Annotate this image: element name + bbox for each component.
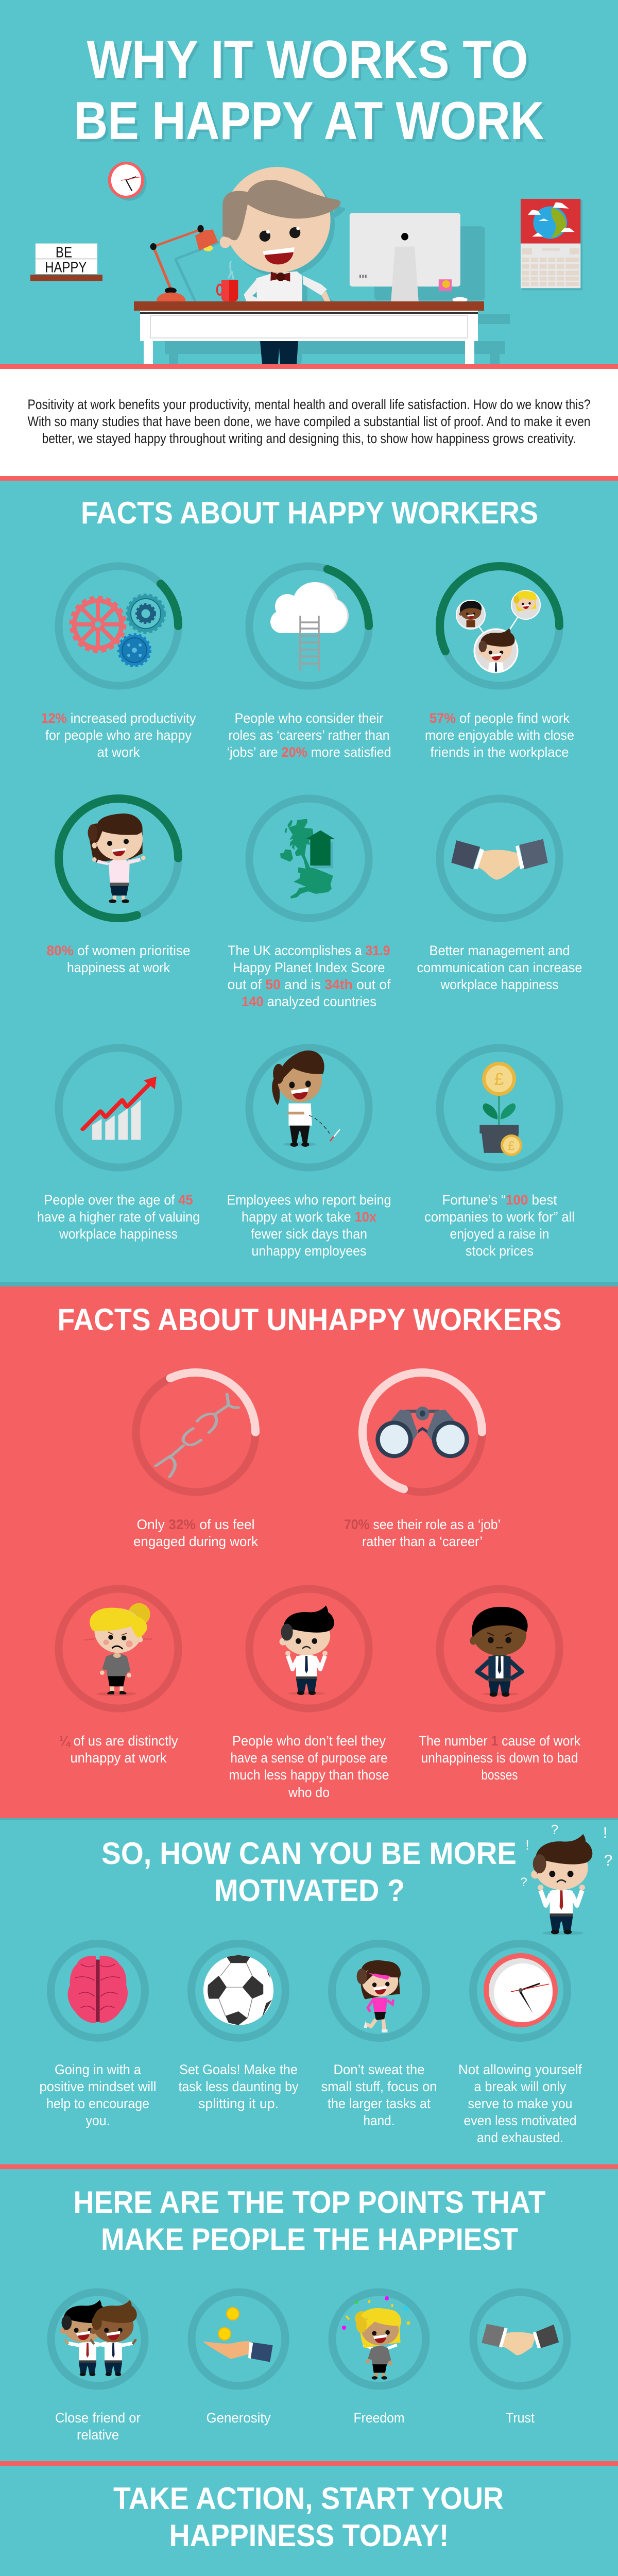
tip: positive mindset, brain: positive mindset will: [39, 2079, 157, 2094]
icon: be happy lightbox sign: HAPPY: [45, 259, 87, 276]
character: confused man: ?: [551, 1822, 558, 1837]
fact: 80% of women: happiness at work: [67, 960, 170, 975]
point: freedom, woman with confetti: [332, 2292, 426, 2426]
fact: management, handshake: Better management and: [430, 943, 570, 958]
tip: positive mindset, brain: [39, 1943, 157, 2128]
point: trust, handshake: [473, 2292, 567, 2426]
fact: sense of purpose, sad man: [229, 1589, 389, 1800]
character: confused man: [520, 1822, 612, 1935]
point: freedom, woman with confetti: Freedom: [353, 2410, 405, 2426]
panel: how can you be more motivated: [39, 1822, 612, 2145]
fact: 32% engaged, broken chain: Only 32% of us feel: [137, 1517, 254, 1532]
fact: fortune 100 best, money plant: Fortune’s “100 best: [442, 1192, 557, 1208]
tip: small stuff, running woman: hand.: [364, 2113, 394, 2128]
tip: take a break, clock: a break will only: [474, 2079, 566, 2094]
tip: small stuff, running woman: the larger tasks at: [328, 2096, 431, 2111]
heading: TAKE ACTION, START YOUR: [113, 2481, 504, 2516]
fact: fortune 100 best, money plant: £: [494, 1070, 504, 1089]
fact: 57% close friends: 57% of people find work: [430, 710, 570, 726]
fact: careers 20%, cloud and ladder: roles as ‘careers’ rather than: [229, 727, 389, 743]
fact: over 45, rising chart: [37, 1048, 200, 1242]
fact: fewer sick days, woman with thermometer: happy at work take 10x: [242, 1209, 376, 1225]
fact: fewer sick days, woman with thermometer: Employees who report being: [227, 1192, 391, 1208]
panel: facts about happy workers: [34, 496, 582, 1259]
tip: positive mindset, brain: help to encourage: [46, 2096, 149, 2111]
character: confused man: ?: [520, 1875, 527, 1889]
icon: desk lamp: [150, 225, 221, 301]
fact: careers 20%, cloud and ladder: People who consider their: [235, 710, 384, 726]
fact: over 45, rising chart: People over the age of 45: [44, 1192, 193, 1208]
fact: fortune 100 best, money plant: enjoyed a raise in: [450, 1226, 549, 1242]
fact: quarter unhappy, angry blonde woman: unhappy at work: [70, 1750, 167, 1766]
divider bar: [0, 2461, 618, 2466]
fact: number 1 cause, bad boss: The number 1 cause of work: [419, 1733, 580, 1749]
tip: set goals, football: splitting it up.: [198, 2096, 279, 2111]
fact: number 1 cause, bad boss: bosses: [481, 1767, 518, 1783]
icon: be happy lightbox sign: BE: [56, 244, 72, 261]
fact: fewer sick days, woman with thermometer: [227, 1048, 391, 1259]
fact: number 1 cause, bad boss: unhappiness is down to bad: [421, 1750, 578, 1766]
illustration: desk: [134, 301, 510, 364]
fact: 57% close friends: friends in the workplace: [431, 744, 569, 760]
fact: 12% productivity, gears: for people who are happy: [45, 727, 192, 743]
fact: UK happy planet index, map: Happy Planet Index Score: [233, 960, 385, 975]
heading: MAKE PEOPLE THE HAPPIEST: [101, 2222, 518, 2257]
character: happy office worker: [217, 167, 346, 301]
tip: small stuff, running woman: small stuff, focus on: [321, 2079, 437, 2094]
fact: 32% engaged, broken chain: engaged during work: [133, 1534, 258, 1549]
icon: be happy lightbox sign: [30, 244, 102, 281]
divider bars: [0, 364, 618, 481]
heading: SO, HOW CAN YOU BE MORE: [101, 1836, 517, 1871]
fact: UK happy planet index, map: [228, 799, 391, 1009]
point: generosity, hand with coins: Generosity: [206, 2410, 271, 2426]
heading: FACTS ABOUT UNHAPPY WORKERS: [58, 1302, 561, 1337]
heading: [101, 1836, 517, 1908]
fact: careers 20%, cloud and ladder: ‘jobs’ are 20% more satisfied: [227, 744, 391, 760]
point: close friend, two men: relative: [77, 2427, 119, 2443]
icon: wall clock: [108, 162, 147, 201]
heading: [113, 2481, 504, 2553]
fact: fortune 100 best, money plant: £: [508, 1139, 515, 1153]
point: close friend, two men: Close friend or: [55, 2410, 141, 2426]
tip: take a break, clock: serve to make you: [468, 2096, 573, 2111]
title: [74, 30, 544, 151]
tip: take a break, clock: Not allowing yourself: [458, 2062, 582, 2077]
fact: fewer sick days, woman with thermometer: unhappy employees: [251, 1243, 367, 1259]
tip: take a break, clock: and exhausted.: [477, 2130, 563, 2145]
fact: UK happy planet index, map: 140 analyzed countries: [242, 994, 376, 1009]
tip: positive mindset, brain: you.: [85, 2113, 110, 2128]
fact: UK happy planet index, map: out of 50 and is 34th out of: [228, 977, 391, 992]
heading: HERE ARE THE TOP POINTS THAT: [73, 2185, 546, 2219]
fact: careers 20%, cloud and ladder: [227, 551, 391, 760]
fact: 32% engaged, broken chain: [116, 1353, 275, 1549]
fact: over 45, rising chart: have a higher rate of valuing: [37, 1209, 200, 1225]
fact: management, handshake: workplace happiness: [440, 977, 558, 992]
fact: management, handshake: communication can increase: [417, 960, 582, 975]
heading: [73, 2185, 546, 2257]
text: intro paragraph: [28, 397, 590, 446]
fact: fortune 100 best, money plant: stock prices: [466, 1243, 534, 1259]
point: trust, handshake: Trust: [506, 2410, 535, 2426]
fact: quarter unhappy, angry blonde woman: [59, 1589, 178, 1766]
tip: take a break, clock: [458, 1943, 582, 2145]
tip: small stuff, running woman: [321, 1943, 437, 2128]
panel: facts about unhappy workers: [0, 1282, 618, 1820]
fact: 12% productivity, gears: 12% increased productivity: [41, 710, 196, 726]
panel: take action: [39, 2481, 551, 2576]
icon: calendar: [521, 199, 582, 290]
fact: management, handshake: [417, 799, 582, 992]
fact: 70% job, binoculars: 70% see their role as a ‘job’: [344, 1517, 501, 1532]
fact: number 1 cause, bad boss: [419, 1589, 580, 1783]
heading: MOTIVATED ?: [214, 1873, 405, 1908]
fact: 12% productivity, gears: at work: [97, 744, 140, 760]
fact: fewer sick days, woman with thermometer: fewer sick days than: [251, 1226, 367, 1242]
tip: positive mindset, brain: Going in with a: [55, 2062, 142, 2077]
fact: sense of purpose, sad man: have a sense of purpose are: [231, 1750, 387, 1766]
tip: set goals, football: task less daunting by: [178, 2079, 299, 2094]
fact: UK happy planet index, map: The UK accomplishes a 31.9: [228, 943, 390, 958]
divider bar: [0, 2164, 618, 2169]
fact: sense of purpose, sad man: much less happy than those: [229, 1767, 389, 1783]
tip: take a break, clock: even less motivated: [464, 2113, 577, 2128]
fact: 70% job, binoculars: rather than a ‘career’: [362, 1534, 483, 1549]
tip: set goals, football: Set Goals! Make the: [179, 2062, 298, 2077]
panel: top points that make people happiest: [51, 2185, 567, 2443]
fact: 12% productivity, gears: [34, 541, 203, 760]
character: confused man: !: [525, 1837, 529, 1853]
fact: 57% close friends: [420, 547, 579, 760]
character: confused man: !: [603, 1824, 607, 1841]
heading: HAPPINESS TODAY!: [169, 2518, 449, 2553]
fact: 80% of women: [43, 783, 194, 975]
character: confused man: ?: [604, 1852, 612, 1869]
fact: fortune 100 best, money plant: companies to work for” all: [424, 1209, 575, 1225]
fact: 70% job, binoculars: [344, 1357, 501, 1549]
fact: fortune 100 best, money plant: [424, 1048, 575, 1259]
heading: FACTS ABOUT HAPPY WORKERS: [81, 496, 538, 530]
tip: small stuff, running woman: Don’t sweat the: [334, 2062, 424, 2077]
icon: computer monitor: [350, 213, 485, 302]
title: WHY IT WORKS TO: [87, 30, 528, 90]
fact: 57% close friends: more enjoyable with close: [425, 727, 574, 743]
fact: sense of purpose, sad man: People who don’t feel they: [232, 1733, 386, 1749]
fact: 80% of women: 80% of women prioritise: [46, 943, 191, 958]
fact: sense of purpose, sad man: who do: [288, 1785, 330, 1800]
tip: set goals, football: [178, 1943, 299, 2111]
panel: hero: [30, 30, 582, 364]
point: close friend, two men: [51, 2292, 145, 2443]
title: BE HAPPY AT WORK: [74, 91, 544, 151]
point: generosity, hand with coins: [192, 2292, 285, 2426]
fact: quarter unhappy, angry blonde woman: ¼ of us are distinctly: [59, 1733, 178, 1749]
fact: over 45, rising chart: workplace happiness: [59, 1226, 178, 1242]
